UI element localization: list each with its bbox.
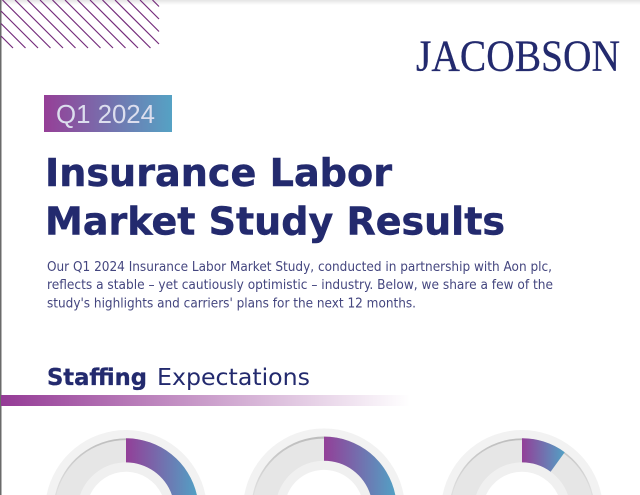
intro paragraph: reflects a stable – yet cautiously optimistic – industry. Below, we share a few of the bbox=[47, 278, 553, 293]
donut chart 2 bbox=[244, 428, 404, 495]
title: Market Study Results bbox=[45, 200, 505, 244]
title bbox=[45, 151, 505, 244]
gradient divider bar bbox=[1, 395, 410, 406]
donut chart 1 bbox=[47, 430, 205, 495]
section heading: Staffing Expectations: Expectations bbox=[157, 365, 310, 391]
section heading: Staffing Expectations: Staffing bbox=[47, 365, 147, 391]
intro paragraph bbox=[47, 260, 553, 312]
donut chart 3 bbox=[443, 430, 601, 495]
intro paragraph: study's highlights and carriers' plans for the next 12 months. bbox=[47, 296, 416, 312]
badge: Q1 2024 bbox=[44, 95, 172, 132]
title: Insurance Labor bbox=[45, 151, 392, 196]
logo: Jacobson: JACOBSON bbox=[416, 32, 620, 80]
hatch pattern bbox=[1, 0, 159, 48]
badge: Q1 2024: Q1 2024 bbox=[56, 99, 155, 129]
intro paragraph: Our Q1 2024 Insurance Labor Market Study, conducted in partnership with Aon plc, bbox=[47, 260, 552, 275]
section heading: Staffing Expectations bbox=[47, 365, 310, 391]
